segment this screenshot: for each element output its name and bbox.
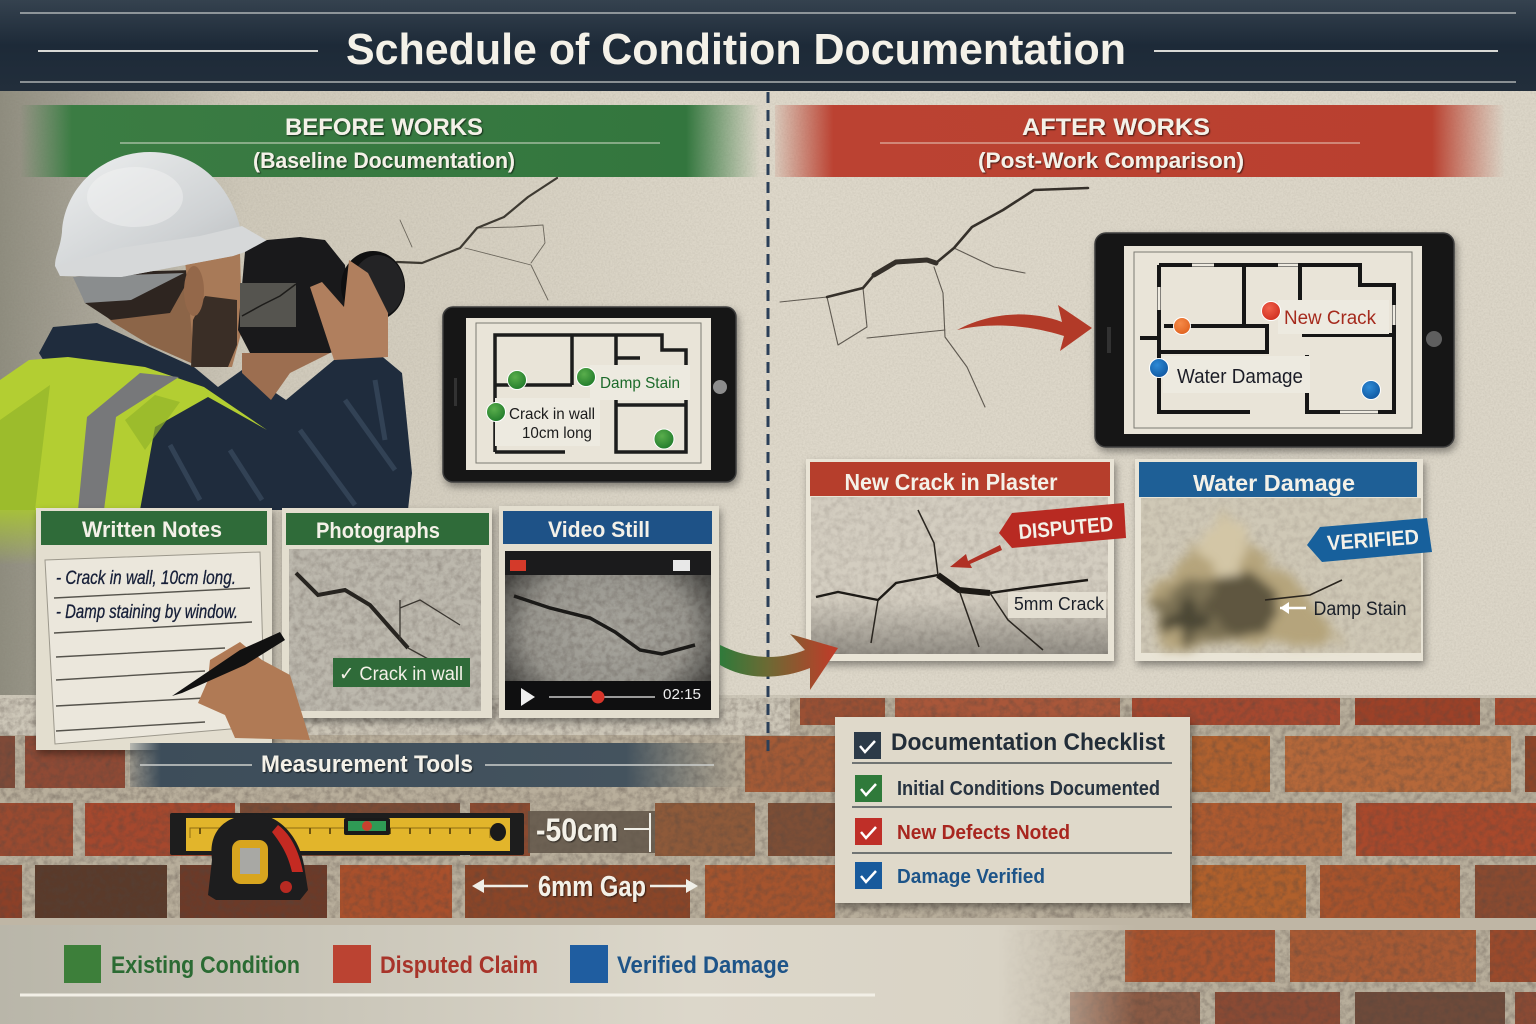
disputed tag: DISPUTED (1018, 513, 1114, 544)
label: crack in wall: 10cm long (522, 425, 592, 442)
label: water damage: Water Damage (1177, 366, 1303, 388)
face (185, 253, 242, 367)
divider: dashed line (766, 92, 770, 756)
legend: verified damage: Verified Damage (617, 952, 789, 979)
legend: disputed claim (333, 945, 538, 983)
panel: video still (499, 506, 719, 718)
panel: new crack in plaster: New Crack in Plaster (844, 469, 1058, 495)
panel heading: before works: BEFORE WORKS (285, 114, 483, 141)
item: new defects: New Defects Noted (897, 822, 1070, 844)
panel heading: before works: (Baseline Documentation) (253, 148, 515, 173)
panel heading: after works: AFTER WORKS (1022, 114, 1210, 141)
stain blotches (1150, 510, 1345, 645)
video controls: 02:15 (663, 686, 701, 703)
jacket (39, 323, 412, 510)
plaster photo (811, 497, 1108, 654)
panel: written notes: Written Notes (82, 517, 222, 542)
beard (191, 296, 237, 367)
item: damage verified: Damage Verified (897, 866, 1045, 888)
panel: video still: Video Still (548, 517, 650, 542)
tape measure (208, 814, 308, 900)
helmet highlight (87, 167, 183, 227)
camera body (238, 237, 354, 353)
measurement tools heading: Measurement Tools (261, 751, 473, 778)
panel heading: after works (775, 105, 1505, 177)
hair (75, 270, 194, 320)
green markers (486, 368, 674, 449)
label: crack in wall (333, 658, 470, 687)
panel: written notes (36, 508, 272, 750)
label: 5mm crack: 5mm Crack (1014, 594, 1105, 614)
panel: photographs (282, 508, 492, 718)
arrow to right tablet (957, 305, 1092, 351)
label: crack in wall: Crack in wall (509, 406, 595, 423)
wall texture (0, 90, 1536, 700)
helmet brim (56, 226, 271, 277)
measurement label: 50cm (528, 811, 655, 853)
ear (184, 266, 204, 316)
panel: water damage: Water Damage (1193, 470, 1355, 496)
panel: new crack in plaster (806, 459, 1126, 661)
camera rear screen (240, 283, 296, 327)
label: water damage (1163, 356, 1310, 393)
panel: photographs: Photographs (316, 518, 440, 543)
label: new crack (1278, 300, 1389, 334)
measurement label: 6mm gap (472, 871, 698, 903)
plaster wall background (0, 90, 1536, 740)
verified tag (1307, 518, 1432, 562)
legend: existing condition: Existing Condition (111, 952, 300, 979)
video top bar (505, 551, 711, 575)
legend: existing condition (64, 945, 300, 983)
label: damp stain: Damp Stain (600, 375, 680, 392)
hi-vis vest (0, 357, 267, 510)
markers (1150, 302, 1380, 400)
flow arrow to after panel (720, 634, 838, 690)
video frame (505, 551, 711, 710)
brick wall (0, 695, 1536, 1024)
checklist title: Documentation Checklist (891, 729, 1165, 756)
measurement label: 50cm: -50cm (536, 812, 618, 848)
title: Schedule of Condition Documentation (346, 25, 1126, 74)
note rule lines (54, 588, 252, 731)
label: damp stain: Damp Stain (1314, 599, 1406, 620)
verified tag: VERIFIED (1326, 526, 1420, 555)
floor plan walls (495, 335, 686, 452)
helmet dome (55, 152, 271, 277)
disputed tag (999, 503, 1126, 548)
label: crack in wall (495, 398, 600, 446)
item: new defects (855, 818, 1070, 845)
measurement tools heading (130, 743, 750, 787)
label: damp stain (590, 365, 690, 400)
vest reflective strip (78, 373, 179, 510)
right tablet with floor plan (1095, 233, 1454, 447)
label: new crack: New Crack (1284, 308, 1376, 329)
hand holding camera (310, 260, 388, 360)
panel heading: after works: (Post-Work Comparison) (978, 148, 1244, 173)
legend: verified damage (570, 945, 789, 983)
spirit level (170, 813, 524, 855)
panel: water damage (1135, 459, 1432, 661)
vest shading (0, 385, 180, 510)
floor plan walls (1140, 265, 1394, 412)
note paper (45, 552, 265, 744)
vest fade below cards (0, 505, 40, 565)
worker photographing the wall (0, 152, 412, 565)
wall crack: before (397, 178, 557, 300)
panel: written notes: - Damp staining by window. (56, 602, 238, 623)
wall crack: after (780, 188, 1088, 407)
jacket folds (170, 380, 395, 505)
measurement label: 6mm gap: 6mm Gap (538, 871, 646, 903)
damp stain photo (1141, 498, 1421, 653)
item: damage verified (855, 862, 1045, 889)
left tablet with floor plan (443, 307, 736, 482)
arrow to crack (950, 545, 1002, 568)
legend: disputed claim: Disputed Claim (380, 952, 538, 979)
item: initial conditions (855, 775, 1160, 802)
plan windows (1159, 265, 1394, 412)
hand writing with pen (172, 632, 310, 740)
panel heading: before works (20, 105, 760, 177)
label: crack in wall: ✓ Crack in wall (339, 664, 463, 685)
header bar (0, 0, 1536, 91)
panel: documentation checklist (835, 717, 1190, 903)
video controls (505, 681, 711, 710)
item: initial conditions: Initial Conditions Documented (897, 778, 1160, 800)
photo of crack (289, 549, 481, 711)
legend (20, 945, 875, 995)
helmet suspension band (73, 273, 184, 303)
lower hand (242, 353, 330, 400)
note text: - Crack in wall, 10cm long. (56, 568, 236, 589)
neck (95, 270, 200, 367)
level vial (344, 818, 390, 835)
camera lens (341, 251, 405, 321)
